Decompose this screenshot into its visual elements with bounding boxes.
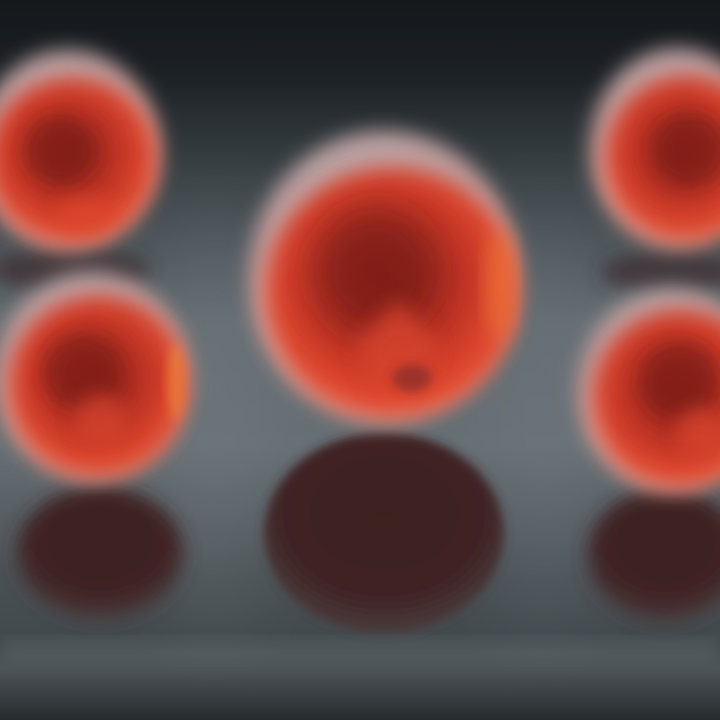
sphere: lower right <box>578 288 720 492</box>
reflection: upper left sphere <box>0 248 150 292</box>
reflection: right sphere <box>587 489 720 621</box>
sphere: lower left <box>0 272 189 480</box>
floor highlight <box>0 642 720 660</box>
sphere: center <box>249 131 519 423</box>
reflection: upper right sphere <box>600 252 720 292</box>
sphere: upper left <box>0 50 160 250</box>
reflection: left sphere <box>16 487 184 619</box>
sphere: upper right <box>590 48 720 248</box>
reflection: center sphere <box>264 433 504 633</box>
